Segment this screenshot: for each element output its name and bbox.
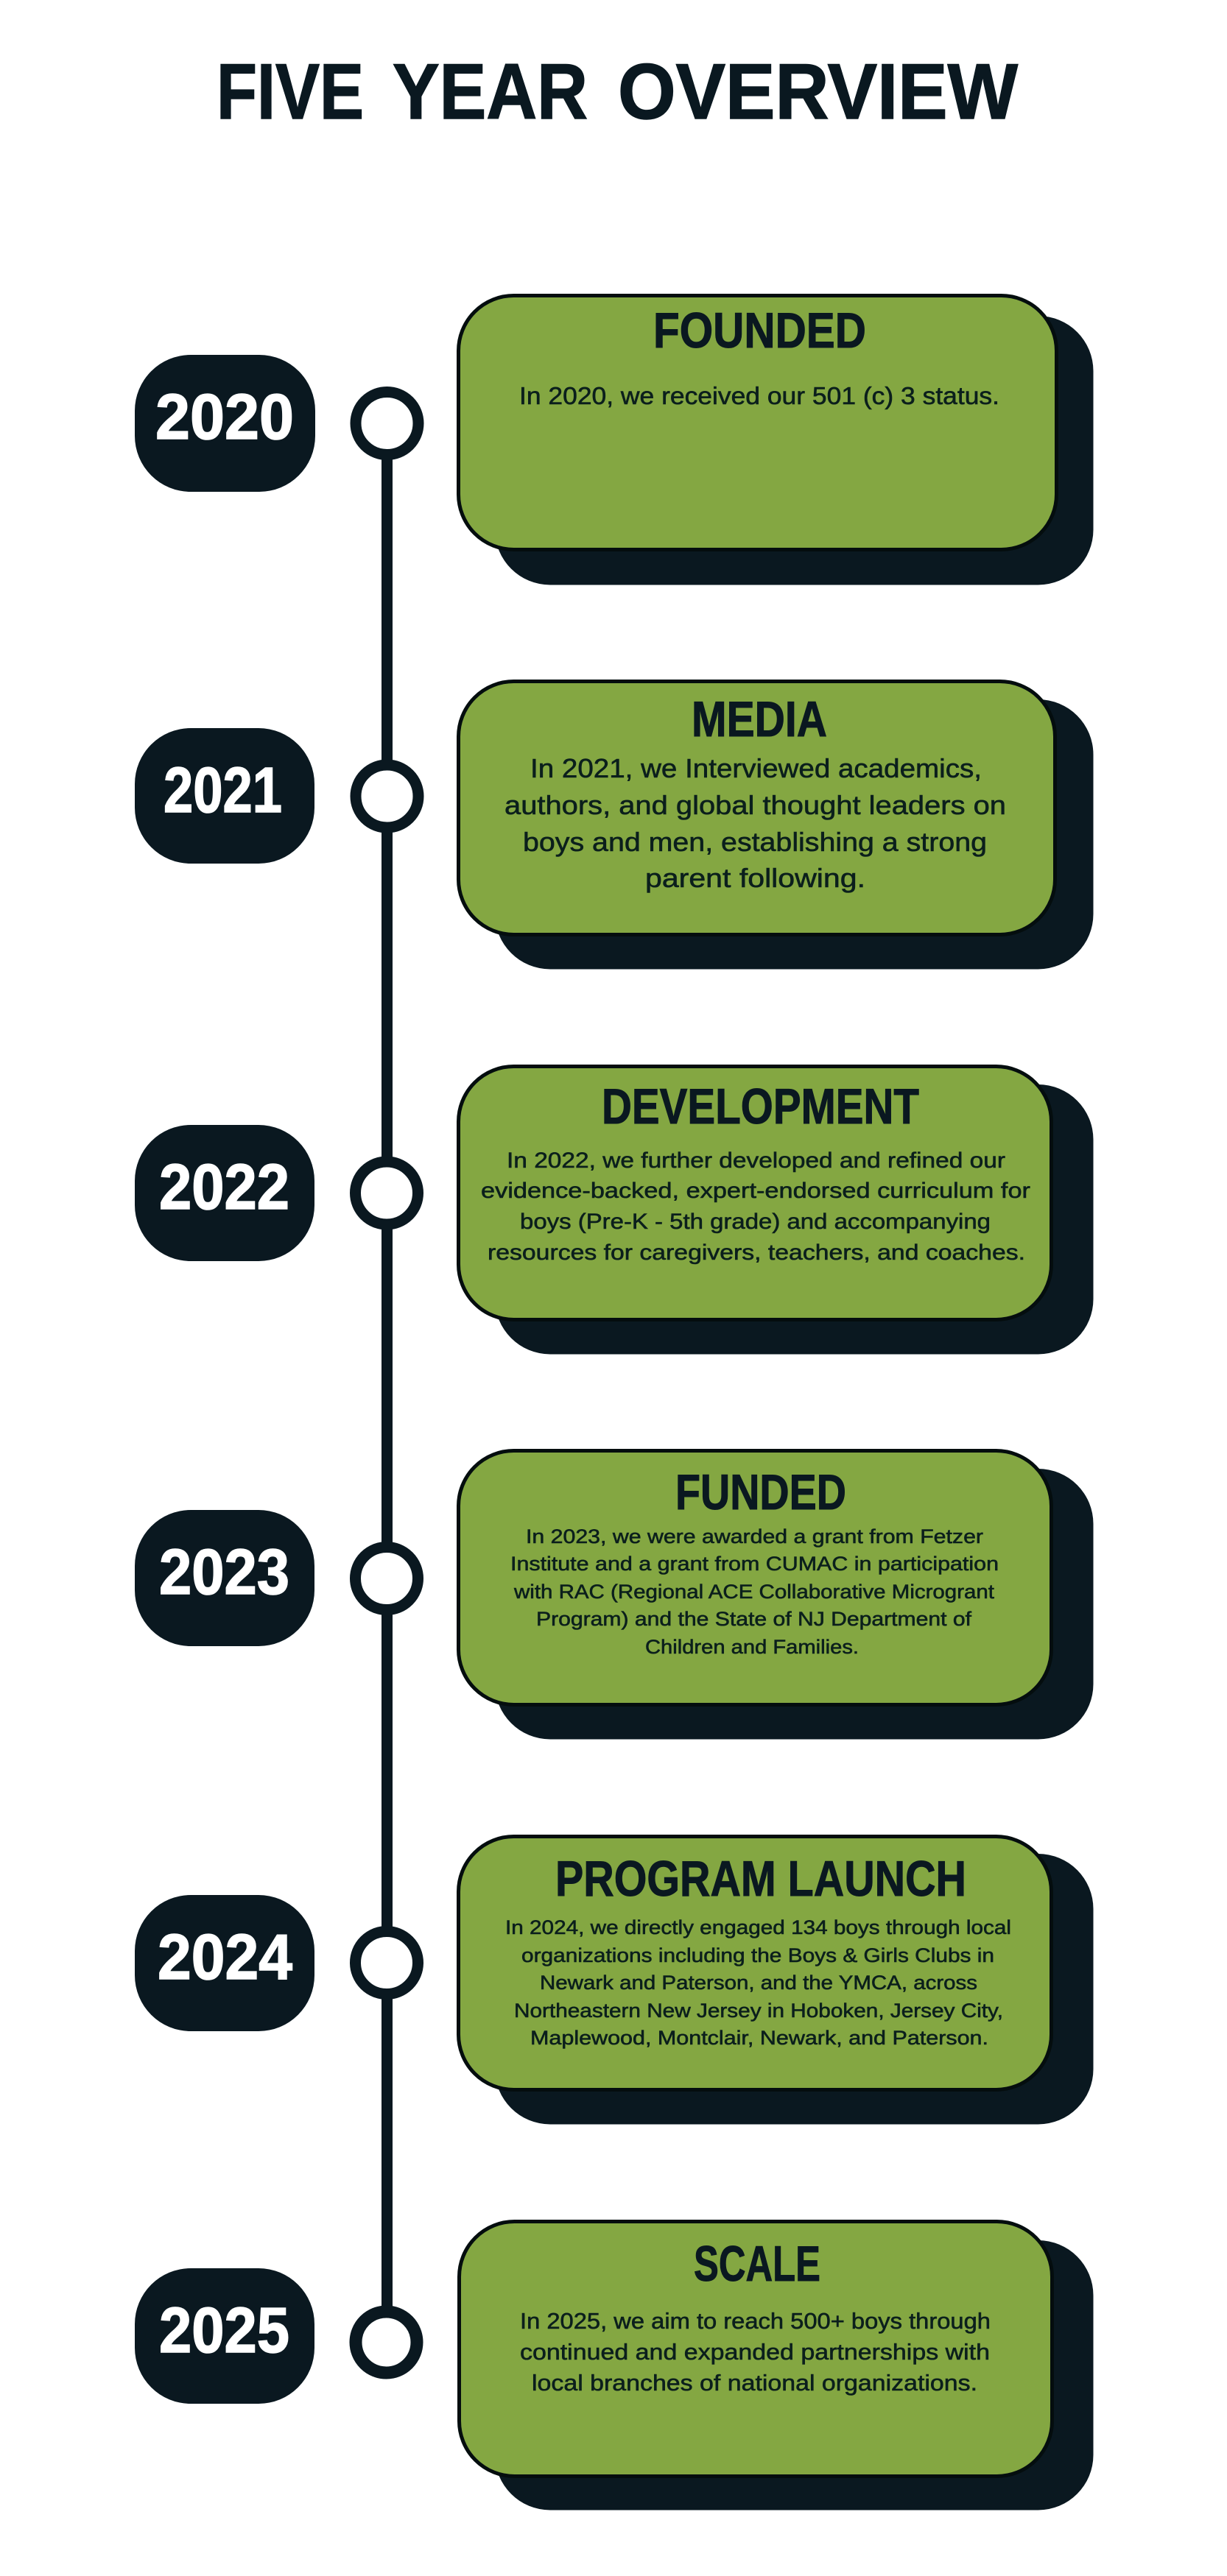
year pill: 2020 bbox=[135, 355, 315, 492]
card body bbox=[458, 1066, 1052, 1319]
timeline line bbox=[382, 423, 393, 2342]
body text: media: In 2021, we Interviewed academics, bbox=[530, 753, 982, 783]
body text: media: authors, and global thought leaders on bbox=[504, 790, 1006, 820]
body text: program launch: Maplewood, Montclair, Newark, and Paterson. bbox=[530, 2027, 988, 2049]
timeline entry: 2021 bbox=[135, 682, 1093, 969]
heading: program launch: PROGRAM LAUNCH bbox=[555, 1851, 966, 1907]
timeline node: 2023 bbox=[355, 1548, 418, 1609]
body text: funded: with RAC (Regional ACE Collaborative Microgrant bbox=[513, 1581, 995, 1603]
heading: development: DEVELOPMENT bbox=[602, 1079, 919, 1135]
timeline node: 2022 bbox=[355, 1162, 418, 1224]
body text: program launch: Newark and Paterson, and the YMCA, across bbox=[540, 1972, 977, 1994]
body text: founded: In 2020, we received our 501 (c) 3 status. bbox=[519, 382, 999, 409]
card shadow bbox=[495, 1084, 1093, 1355]
body text: development: resources for caregivers, teachers, and coaches. bbox=[488, 1241, 1025, 1265]
card body bbox=[458, 1450, 1052, 1705]
card shadow bbox=[495, 316, 1093, 585]
title: OVERVIEW bbox=[618, 47, 1018, 135]
body text: program launch: organizations including the Boys & Girls Clubs in bbox=[521, 1944, 994, 1966]
title: YEAR bbox=[393, 47, 588, 135]
year pill: 2021: 2021 bbox=[164, 755, 282, 826]
heading: funded: FUNDED bbox=[675, 1464, 846, 1520]
body text: funded: Program) and the State of NJ Department of bbox=[536, 1608, 972, 1630]
card body bbox=[458, 1836, 1052, 2089]
card body bbox=[460, 2222, 1052, 2477]
title: FIVE bbox=[217, 47, 364, 135]
heading: scale: SCALE bbox=[694, 2236, 820, 2292]
heading: media: MEDIA bbox=[692, 691, 827, 747]
body text: program launch: In 2024, we directly engaged 134 boys through local bbox=[505, 1916, 1011, 1938]
panel: program launch bbox=[458, 1836, 1093, 2125]
year pill: 2024: 2024 bbox=[158, 1922, 292, 1993]
card body bbox=[458, 682, 1055, 935]
panel: funded bbox=[458, 1450, 1093, 1739]
body text: development: boys (Pre-K - 5th grade) and accompanying bbox=[520, 1210, 991, 1234]
timeline entry: 2023 bbox=[135, 1450, 1093, 1739]
timeline node: 2025 bbox=[356, 2312, 417, 2373]
body text: funded: Children and Families. bbox=[645, 1636, 859, 1658]
panel: founded bbox=[458, 296, 1093, 585]
body text: funded bbox=[510, 1525, 999, 1658]
timeline node: 2024 bbox=[355, 1932, 418, 1994]
title bbox=[217, 47, 1018, 135]
timeline node: 2020 bbox=[356, 392, 418, 455]
year pill: 2024 bbox=[135, 1895, 314, 2031]
body text: development bbox=[481, 1148, 1030, 1265]
heading: founded: FOUNDED bbox=[653, 303, 866, 359]
card body bbox=[458, 296, 1056, 549]
body text: program launch bbox=[505, 1916, 1011, 2049]
year pill: 2022 bbox=[135, 1125, 314, 1261]
timeline entry: 2024 bbox=[135, 1836, 1093, 2125]
year pill: 2025 bbox=[135, 2268, 314, 2404]
panel: development bbox=[458, 1066, 1093, 1355]
panel: media bbox=[458, 682, 1093, 969]
card shadow bbox=[495, 1469, 1093, 1739]
year pill: 2023: 2023 bbox=[159, 1536, 289, 1608]
body text: scale: In 2025, we aim to reach 500+ boys through bbox=[520, 2308, 991, 2334]
body text: media: parent following. bbox=[645, 863, 865, 893]
card shadow bbox=[495, 699, 1093, 969]
body text: development: evidence-backed, expert-endorsed curriculum for bbox=[481, 1179, 1030, 1203]
body text: scale: continued and expanded partnerships with bbox=[520, 2339, 990, 2365]
year pill: 2021 bbox=[135, 728, 314, 864]
timeline entry: 2025 bbox=[135, 2222, 1093, 2510]
body text: media: boys and men, establishing a strong bbox=[523, 827, 987, 857]
timeline entry: 2022 bbox=[135, 1066, 1093, 1355]
card shadow bbox=[495, 2240, 1093, 2510]
timeline node: 2021 bbox=[356, 765, 418, 828]
panel: scale bbox=[460, 2222, 1093, 2510]
body text: funded: Institute and a grant from CUMAC in participation bbox=[510, 1553, 999, 1575]
body text: development: In 2022, we further developed and refined our bbox=[507, 1148, 1005, 1173]
body text: scale bbox=[520, 2308, 991, 2396]
year pill: 2020: 2020 bbox=[155, 381, 294, 453]
year pill: 2022: 2022 bbox=[159, 1151, 289, 1223]
timeline entry: 2020 bbox=[135, 296, 1093, 585]
year pill: 2025: 2025 bbox=[159, 2295, 289, 2366]
body text: funded: In 2023, we were awarded a grant from Fetzer bbox=[526, 1525, 983, 1548]
body text: scale: local branches of national organizations. bbox=[532, 2370, 977, 2396]
year pill: 2023 bbox=[135, 1510, 314, 1646]
body text: media bbox=[504, 753, 1006, 893]
body text: program launch: Northeastern New Jersey in Hoboken, Jersey City, bbox=[514, 2000, 1003, 2022]
card shadow bbox=[495, 1854, 1093, 2125]
